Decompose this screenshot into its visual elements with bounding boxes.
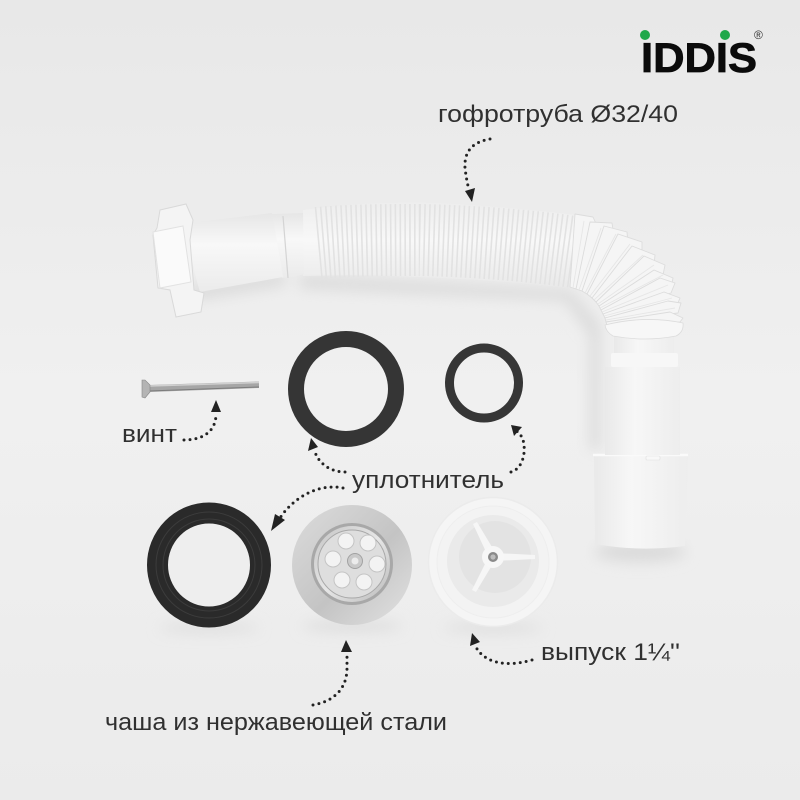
logo: IDDIS: IDDIS	[641, 34, 757, 81]
pipe inlet cylinder	[187, 213, 283, 292]
logo: IDDIS: ®	[754, 28, 763, 42]
drain holes	[325, 533, 385, 590]
threaded coupling	[272, 213, 304, 278]
gasket: ribbed ring	[156, 512, 262, 618]
corrugated hose: straight section	[303, 202, 575, 288]
siphon assembly	[153, 202, 688, 549]
gasket: small flat ring	[450, 348, 518, 418]
arrow: to small flat ring	[511, 425, 524, 472]
label: corrugated pipe: гофротруба Ø32/40	[438, 101, 678, 128]
corrugated hose: bend	[570, 214, 683, 325]
drain pipe lower sleeve	[593, 455, 688, 549]
hose end flange	[605, 319, 683, 339]
shadows	[159, 272, 686, 632]
stainless steel bowl	[292, 505, 412, 625]
arrow: to bowl	[313, 640, 352, 705]
gasket: large flat ring	[296, 339, 396, 439]
arrow: to outlet	[470, 633, 532, 664]
label: screw: винт	[122, 421, 177, 448]
arrow: to screw	[184, 400, 221, 440]
label: bowl: чаша из нержавеющей стали	[105, 709, 447, 736]
arrow: to corrugated pipe	[465, 139, 490, 202]
label: gasket: уплотнитель	[352, 467, 504, 494]
screw	[142, 380, 259, 398]
label: outlet: выпуск 1¼''	[541, 639, 680, 666]
arrow: to large flat ring	[308, 438, 345, 472]
white outlet	[428, 498, 558, 626]
drain pipe upper section	[605, 330, 680, 455]
arrow: to ribbed gasket	[271, 487, 343, 531]
union nut	[153, 204, 204, 317]
